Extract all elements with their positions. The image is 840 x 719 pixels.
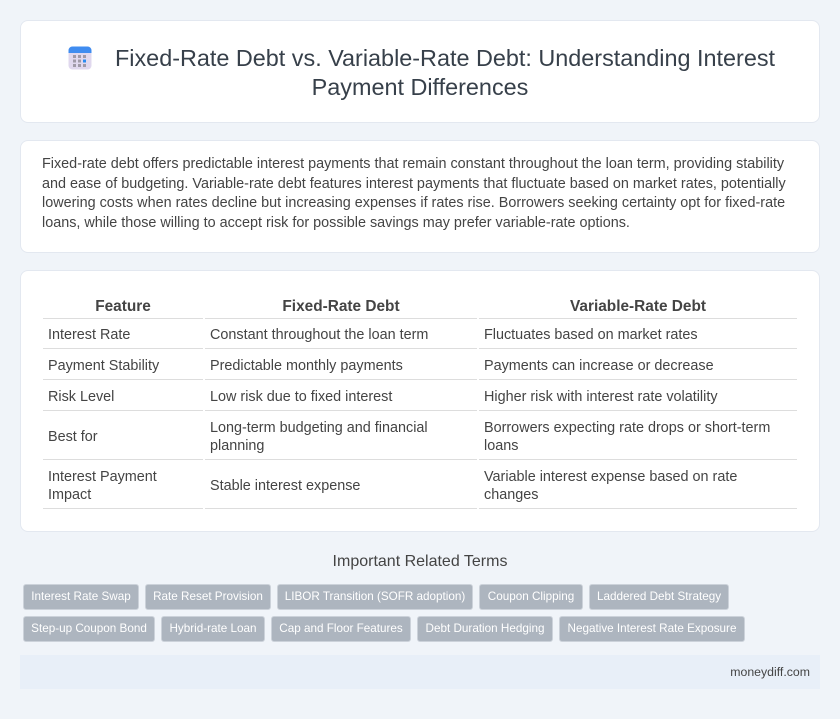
row: interest payment impact <box>43 468 797 509</box>
row: best for: planning <box>210 438 264 454</box>
tag: Debt Duration Hedging <box>426 622 544 635</box>
header card <box>20 20 820 123</box>
tag: Cap and Floor Features <box>279 622 403 635</box>
row: interest rate: Interest Rate <box>48 326 130 342</box>
row: payment stability: Payments can increase or decrease <box>484 358 714 374</box>
tag <box>479 584 583 610</box>
intro text: Fixed-rate debt offers predictable interest payments that remain constant throughout the loan term, providing stability <box>42 156 784 172</box>
table header row: Variable-Rate Debt <box>570 298 706 315</box>
tag: Laddered Debt Strategy <box>597 590 721 603</box>
table header row <box>43 298 797 319</box>
tag: Negative Interest Rate Exposure <box>568 622 736 635</box>
row: interest payment impact: Stable interest expense <box>210 478 360 494</box>
row: interest rate: Constant throughout the loan term <box>210 326 428 342</box>
row: interest payment impact: Impact <box>48 486 91 502</box>
panel: introduction <box>20 140 820 253</box>
tag: Hybrid-rate Loan <box>169 622 257 635</box>
footer bar <box>20 655 820 689</box>
row: best for: Long-term budgeting and financial <box>210 420 428 436</box>
table header row: Feature <box>95 298 151 315</box>
row: risk level: Higher risk with interest rate volatility <box>484 388 718 404</box>
tag <box>23 584 139 610</box>
tag: Interest Rate Swap <box>31 590 131 603</box>
row: interest payment impact: changes <box>484 486 538 502</box>
row: interest payment impact: Interest Payment <box>48 468 157 484</box>
related term tags <box>23 584 745 642</box>
intro text: and ease of budgeting. Variable-rate debt features interest payments that fluctuate based on market rates, potentially <box>42 176 786 192</box>
row: payment stability: Predictable monthly payments <box>210 358 403 374</box>
tag <box>417 616 553 642</box>
row: risk level: Risk Level <box>48 388 114 404</box>
tag: Rate Reset Provision <box>153 590 263 603</box>
tag <box>277 584 473 610</box>
footer source: moneydiff.com <box>730 665 810 679</box>
tag <box>559 616 745 642</box>
title: Payment Differences <box>312 74 528 100</box>
intro text: loans, while those willing to accept risk for possible savings may prefer variable-rate options. <box>42 214 630 230</box>
row: risk level <box>43 388 797 411</box>
intro text: lowering costs when rates decline but increasing expenses if rates rise. Borrowers seeking certainty opt for fixed-rate <box>42 195 785 211</box>
panel: comparison table <box>20 270 820 532</box>
tag: Coupon Clipping <box>488 590 574 603</box>
row: best for: Best for <box>48 428 98 444</box>
row: interest rate <box>43 326 797 349</box>
row: interest payment impact: Variable interest expense based on rate <box>484 468 737 484</box>
row: risk level: Low risk due to fixed interest <box>210 388 392 404</box>
heading: related terms: Important Related Terms <box>333 553 507 570</box>
row: interest rate: Fluctuates based on market rates <box>484 326 698 342</box>
intro text <box>42 156 786 230</box>
row: payment stability <box>43 358 797 380</box>
tag <box>271 616 411 642</box>
row: best for: Borrowers expecting rate drops or short-term <box>484 420 770 436</box>
tag <box>145 584 271 610</box>
row: best for: loans <box>484 438 518 454</box>
tag <box>23 616 155 642</box>
row: best for <box>43 420 797 460</box>
title: Fixed-Rate Debt vs. Variable-Rate Debt: Understanding Interest <box>115 45 775 71</box>
table header row: Fixed-Rate Debt <box>282 298 400 315</box>
tag <box>589 584 729 610</box>
row: payment stability: Payment Stability <box>48 358 159 374</box>
tag: Step-up Coupon Bond <box>31 622 147 635</box>
title <box>115 45 775 100</box>
tag: LIBOR Transition (SOFR adoption) <box>285 590 465 603</box>
tag <box>161 616 265 642</box>
icon: calendar <box>68 46 92 70</box>
